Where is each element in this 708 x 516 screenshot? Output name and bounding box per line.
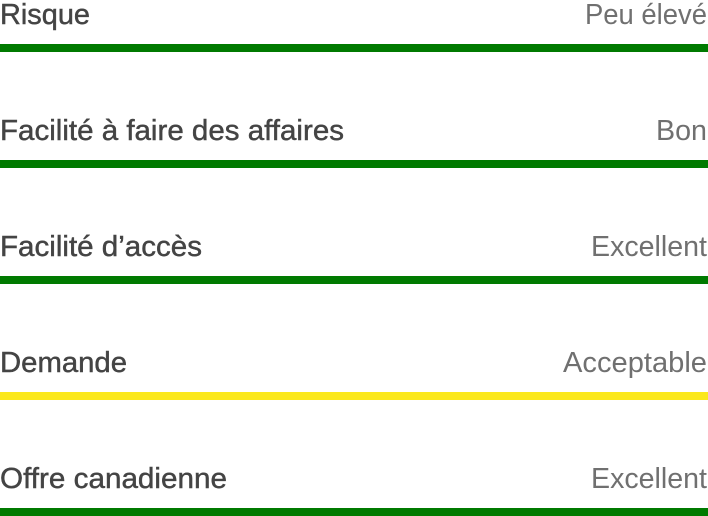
row: Facilité d'accès xyxy=(0,231,708,284)
row: Offre canadienne xyxy=(0,463,708,516)
label: Facilité d'accès: Facilité d’accès xyxy=(0,231,202,263)
value: Acceptable: Acceptable xyxy=(563,347,707,379)
bar: green xyxy=(0,508,708,516)
label: Facilité à faire des affaires: Facilité à faire des affaires xyxy=(0,115,344,147)
bar: green xyxy=(0,276,708,284)
row: Demande xyxy=(0,347,708,400)
bar: green xyxy=(0,44,708,52)
bar: green xyxy=(0,160,708,168)
bar: yellow xyxy=(0,392,708,400)
row: Facilité à faire des affaires xyxy=(0,115,708,168)
row: Risque xyxy=(0,0,708,52)
value: Excellent: Excellent xyxy=(591,231,707,263)
value: Excellent: Excellent xyxy=(591,463,707,495)
label: Demande: Demande xyxy=(0,347,127,379)
label: Offre canadienne: Offre canadienne xyxy=(0,463,227,495)
value: Bon: Bon xyxy=(656,115,707,147)
